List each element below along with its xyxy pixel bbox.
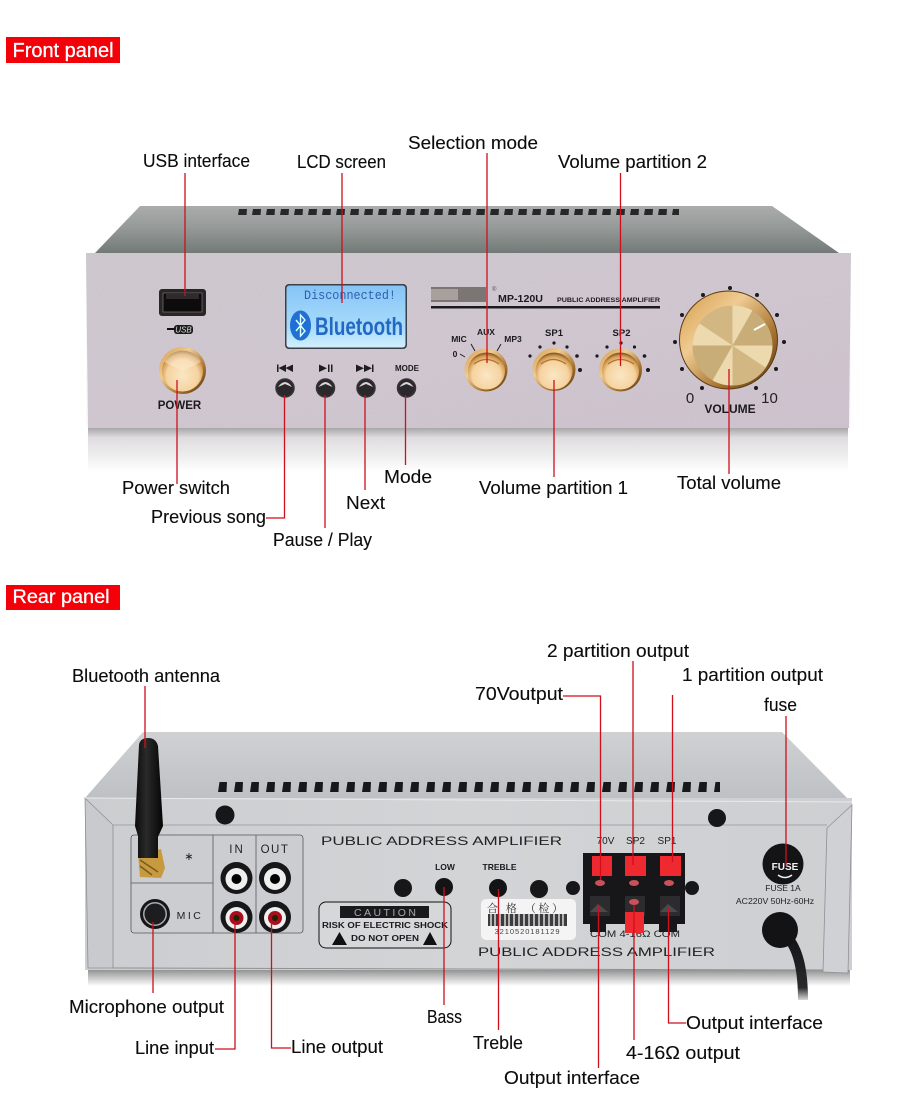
front panel callouts (122, 132, 781, 550)
fuse holder: AC220V 50Hz-60Hz (736, 896, 814, 906)
label: Bluetooth antenna: Bluetooth antenna (72, 665, 221, 686)
brand logo and model strip (431, 286, 660, 308)
front fascia (86, 253, 851, 428)
label: Volume partition 2: Volume partition 2 (558, 151, 707, 172)
label: Selection mode: Selection mode (408, 132, 538, 153)
label: 1 partition output: 1 partition output (682, 664, 823, 685)
speaker terminal block: 70V (597, 836, 615, 847)
RCA sockets (220, 862, 291, 933)
label: Previous song: Previous song (151, 506, 266, 527)
brand logo and model strip: ® (492, 286, 497, 293)
fuse holder: FUSE 1A (765, 883, 801, 893)
reflection under front panel (88, 428, 848, 472)
label: Line input: Line input (135, 1037, 214, 1058)
brand logo and model strip: MP-120U (498, 293, 543, 305)
heading: rear panel tag: Rear panel (12, 587, 110, 608)
printed title top: PUBLIC ADDRESS AMPLIFIER (321, 834, 562, 848)
selection knob (451, 327, 522, 392)
SP1 knob: SP1 (545, 328, 564, 339)
power knob (158, 347, 206, 412)
shadow under rear panel (88, 968, 850, 986)
speaker terminal block: SP2 (626, 836, 645, 847)
label: Mode: Mode (384, 466, 432, 487)
fuse holder (736, 844, 814, 906)
selection knob: AUX (477, 327, 495, 337)
top lid with vents (95, 206, 839, 253)
label: Treble: Treble (473, 1032, 523, 1053)
SP2 knob: SP2 (613, 328, 630, 339)
top lid with vents (85, 732, 852, 803)
bass and treble controls: TREBLE (482, 862, 517, 872)
caution sticker (319, 902, 451, 948)
power cord (762, 912, 803, 1000)
brand logo and model strip: PUBLIC ADDRESS AMPLIFIER (557, 297, 660, 304)
printed title bottom: PUBLIC ADDRESS AMPLIFIER (478, 945, 715, 959)
LCD screen: Bluetooth (315, 313, 403, 341)
bass and treble controls: LOW (435, 862, 456, 872)
Bluetooth antenna (135, 738, 165, 878)
speaker terminal block: SP1 (658, 836, 677, 847)
power knob: POWER (158, 400, 202, 412)
label: Power switch: Power switch (122, 477, 230, 498)
input jack plate: MIC (177, 910, 203, 922)
rear fascia (85, 798, 852, 970)
selection knob: 0 (453, 349, 458, 359)
input jack plate: OUT (261, 844, 289, 856)
panel: amplifier front view (86, 206, 851, 472)
serial number sticker: 3210520181129 (494, 927, 560, 936)
SP1 knob (528, 328, 582, 391)
label: Pause / Play: Pause / Play (273, 529, 373, 550)
master volume knob: 10 (761, 390, 778, 407)
icon: USB port: USB (175, 326, 192, 334)
side flanges (85, 798, 852, 973)
LCD screen (285, 284, 407, 349)
master volume knob: 0 (686, 390, 694, 407)
heading: rear panel tag (6, 585, 120, 610)
master volume knob (673, 286, 786, 416)
input jack plate: IN (229, 844, 245, 856)
speaker terminal block (583, 836, 685, 940)
fuse holder: FUSE (772, 862, 799, 873)
label: 2 partition output: 2 partition output (547, 640, 689, 661)
selection knob: MP3 (504, 334, 522, 344)
transport buttons: MODE (395, 364, 420, 373)
label: USB interface: USB interface (143, 150, 250, 171)
label: Microphone output: Microphone output (69, 996, 224, 1017)
input jack plate: ∗ (184, 850, 194, 863)
rear panel callouts (69, 640, 823, 1088)
caution sticker: CAUTION (354, 907, 416, 919)
caution sticker: DO NOT OPEN (351, 934, 419, 943)
speaker terminal block: COM 4-16Ω COM (590, 929, 680, 940)
label: fuse: fuse (764, 694, 797, 715)
selection knob: MIC (451, 334, 467, 344)
label: Output interface right: Output interface (686, 1012, 823, 1033)
icon: USB port (159, 289, 206, 334)
leader lines: rear panel (145, 661, 786, 1068)
input jack plate (131, 835, 303, 933)
serial number sticker (481, 899, 576, 940)
serial number sticker: 合 格 （检） (487, 901, 563, 915)
microphone jack (140, 899, 170, 929)
screws (216, 806, 726, 904)
label: Next: Next (346, 492, 385, 513)
label: 4-16 ohm output: 4-16Ω output (626, 1042, 740, 1063)
panel: amplifier rear view (85, 732, 852, 1000)
label: Output interface bottom: Output interface (504, 1067, 640, 1088)
label: Bass: Bass (427, 1006, 462, 1027)
label: LCD screen: LCD screen (297, 151, 386, 172)
caution sticker: RISK OF ELECTRIC SHOCK (322, 921, 448, 930)
bass and treble controls (435, 862, 517, 897)
label: Total volume: Total volume (677, 472, 781, 493)
label: 70V output: 70Voutput (475, 683, 563, 704)
label: Line output: Line output (291, 1036, 383, 1057)
heading: front panel tag: Front panel (12, 40, 114, 62)
transport buttons (276, 364, 420, 397)
SP2 knob (595, 328, 650, 392)
label: Volume partition 1: Volume partition 1 (479, 477, 628, 498)
master volume knob: VOLUME (704, 402, 756, 416)
leader lines: front panel (177, 153, 729, 528)
LCD screen: Disconnected! (304, 289, 396, 303)
